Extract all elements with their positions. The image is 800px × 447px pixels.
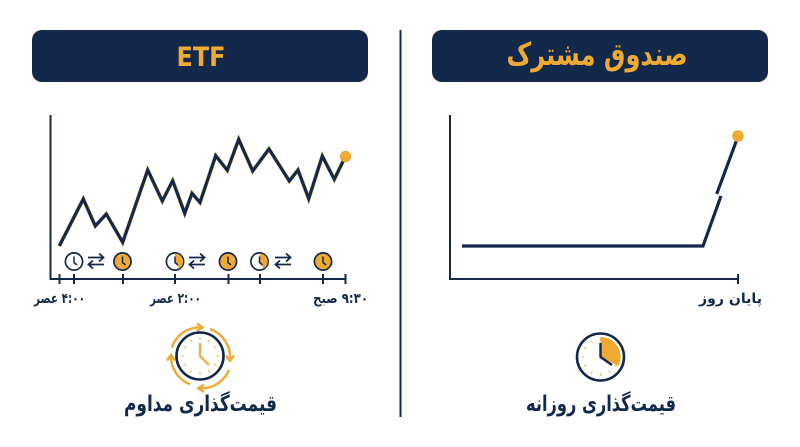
clock face (176, 332, 224, 380)
header: ETF (32, 30, 368, 82)
time label: 4:00 pm: ۴:۰۰ عصر (33, 291, 85, 307)
chart axes and ticks (50, 115, 346, 284)
time label: 2:00 pm: ۲:۰۰ عصر (149, 291, 201, 307)
icon: clock with shaded sector (577, 334, 624, 380)
shaded sector (600, 337, 621, 366)
price line (59, 139, 345, 246)
price line (462, 140, 737, 246)
icon: clock with circular arrows (167, 324, 234, 392)
clock hands (600, 343, 612, 365)
end point (732, 130, 744, 142)
end point (340, 151, 351, 162)
chart: mutual fund end of day price (450, 115, 744, 284)
circular arrows (167, 324, 234, 392)
center divider (400, 30, 402, 417)
header: ETF: ETF (176, 42, 226, 73)
header: mutual fund: صندوق مشترک (506, 37, 688, 73)
chart axes and tick (450, 115, 738, 284)
time label: 9:30 am: ۹:۳۰ صبح (313, 291, 368, 307)
heading: daily pricing: قیمت‌گذاری روزانه (526, 390, 676, 417)
clock and swap icons row (65, 253, 332, 270)
clock hands (200, 343, 209, 365)
label: end of day: پایان روز (698, 291, 762, 307)
chart: ETF continuous price line (50, 115, 351, 284)
heading: continuous pricing: قیمت‌گذاری مداوم (124, 390, 277, 417)
header: mutual fund (432, 30, 768, 82)
clock face (577, 334, 624, 380)
